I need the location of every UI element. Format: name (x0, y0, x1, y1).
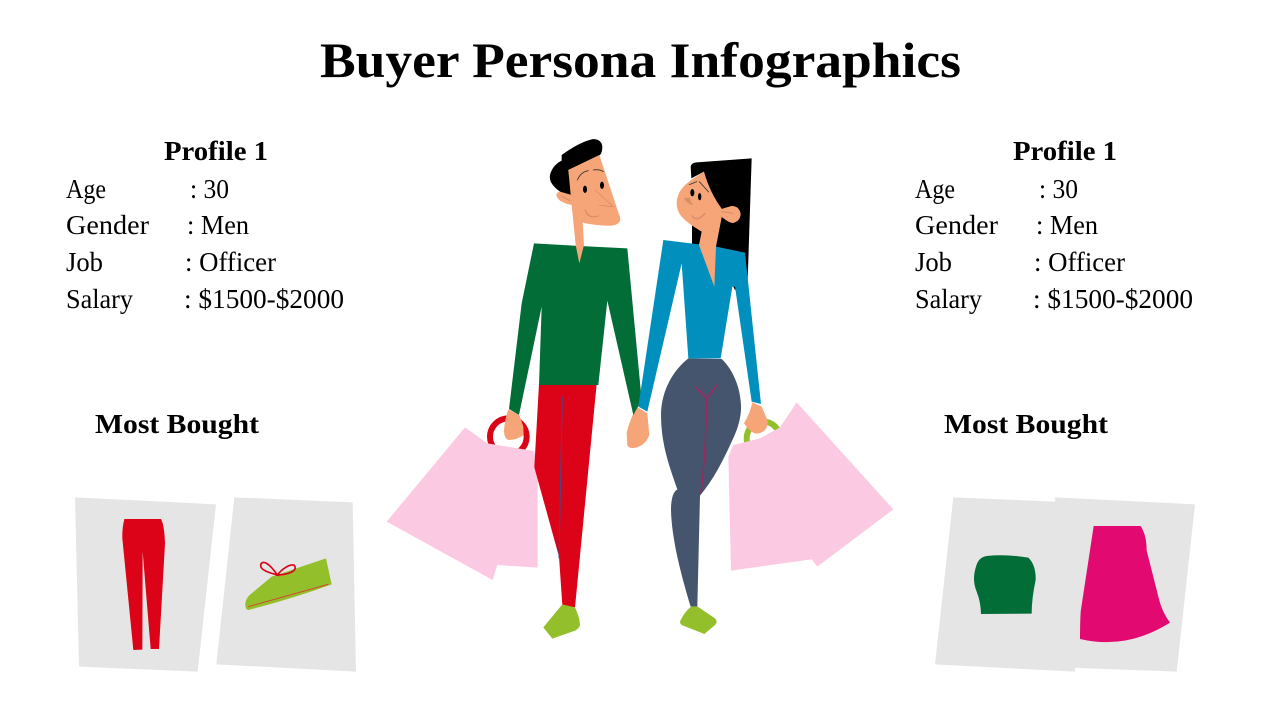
right profile details: : Officer (1034, 247, 1125, 277)
bag handle: green ring (747, 422, 780, 455)
man's red trousers (534, 384, 597, 607)
card: green shoe (216, 497, 356, 672)
man's hair (550, 139, 602, 195)
left most bought heading: Most Bought (95, 409, 259, 439)
woman's left hand (627, 407, 649, 448)
left profile details: Job (66, 247, 103, 277)
right profile details: : $1500-$2000 (1033, 284, 1193, 314)
woman's facial features (684, 182, 733, 219)
man's facial features (562, 170, 613, 217)
woman's green shoe (680, 607, 717, 634)
left profile heading: Profile 1 (164, 136, 268, 166)
woman's blue top (638, 240, 761, 412)
left profile details: : 30 (190, 174, 229, 204)
panel: right profile (915, 136, 1193, 314)
left profile details: Salary (66, 284, 133, 314)
pink shopping bag left (387, 427, 538, 580)
woman's right hand (744, 402, 768, 434)
title: Buyer Persona Infographics (320, 32, 961, 88)
right profile details: : Men (1036, 210, 1098, 240)
left profile details: Age (66, 174, 106, 204)
woman's slate trousers (661, 358, 741, 607)
card: green top (935, 497, 1075, 672)
right profile details: : 30 (1039, 174, 1078, 204)
right profile details: Gender (915, 210, 998, 240)
woman's face and neck (677, 172, 723, 287)
left shopping bag with man's leg (387, 384, 597, 639)
panel: left product cards (75, 497, 356, 672)
card: pink skirt (1055, 497, 1195, 672)
right profile heading: Profile 1 (1013, 136, 1117, 166)
woman's hair (691, 158, 752, 290)
woman's ear (718, 206, 741, 223)
right profile details (915, 174, 1193, 314)
illustration: couple with shopping bags (387, 139, 893, 639)
man's right hand (504, 409, 524, 440)
left profile details: : Men (187, 210, 249, 240)
icon: pink skirt (1080, 526, 1170, 642)
right profile details: Salary (915, 284, 982, 314)
trouser seam (696, 385, 717, 493)
left profile details: Gender (66, 210, 149, 240)
panel: right product cards (935, 497, 1195, 672)
trouser crease (559, 397, 562, 558)
left profile details (66, 174, 344, 314)
woman's upper body (638, 172, 761, 412)
man's face and neck (568, 155, 620, 263)
icon: green top (974, 555, 1036, 614)
card: red trousers (75, 497, 216, 672)
left profile details: : Officer (185, 247, 276, 277)
woman's lower body and right bag (627, 358, 893, 634)
right profile details: Job (915, 247, 952, 277)
right most bought heading: Most Bought (944, 409, 1108, 439)
man's green sweater (509, 243, 642, 415)
right profile details: Age (915, 174, 955, 204)
icon: red trousers (122, 519, 165, 650)
pink shopping bag right (728, 402, 893, 571)
bag handle: red ring (490, 418, 527, 455)
man's ear (556, 192, 573, 205)
left profile details: : $1500-$2000 (184, 284, 344, 314)
man's upper body (509, 139, 642, 415)
panel: left profile (66, 136, 344, 314)
icon: green shoe (245, 558, 332, 610)
man's green shoe (543, 604, 580, 639)
